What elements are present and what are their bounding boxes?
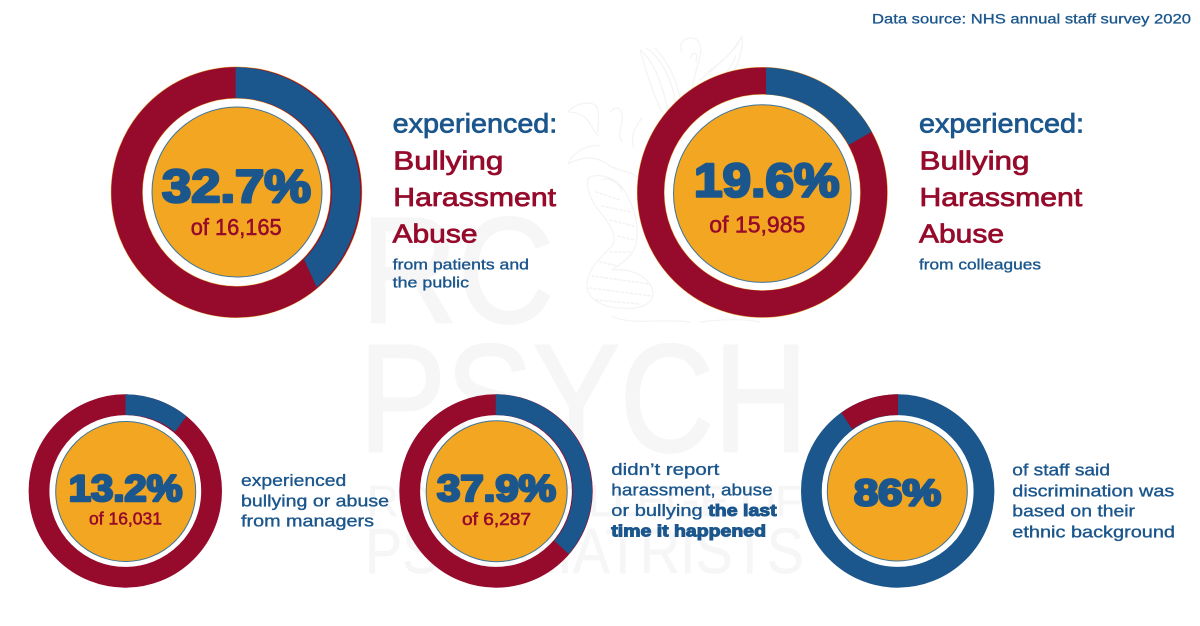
watermark text ROYAL COLLEGE OF: ROYAL COLLEGE OF: [367, 477, 802, 526]
description text: didn’t report: [611, 461, 720, 479]
sample size: of 16,031: [89, 508, 162, 528]
sample size: of 15,985: [709, 211, 805, 237]
donut chart 32.7%: [127, 67, 360, 302]
watermark text PSYCHIATRISTS: PSYCHIATRISTS: [365, 515, 804, 587]
description text: from colleagues: [919, 256, 1041, 273]
watermark text RC: RC: [361, 186, 554, 354]
sample size: of 16,165: [191, 214, 282, 240]
description text: ethnic background: [1012, 523, 1175, 541]
value 37.9%: 37.9%: [437, 468, 556, 509]
donut chart 86%: [811, 394, 984, 577]
description text: or bullying: [611, 502, 703, 520]
description text: experienced: [241, 472, 346, 490]
watermark: RCPsych logotype and crest: [359, 36, 808, 587]
description text: discrimination was: [1012, 482, 1174, 500]
donut chart 37.9%: [410, 394, 592, 577]
description text: Abuse: [392, 219, 478, 249]
description text: the public: [393, 275, 470, 292]
value 86%: 86%: [854, 471, 941, 513]
donut chart 13.2%: [39, 394, 212, 577]
description text: time it happened: [611, 523, 766, 541]
description text: harassment, abuse: [611, 482, 773, 500]
description text: from patients and: [393, 256, 529, 273]
description text: Abuse: [919, 219, 1004, 249]
sample size: of 6,287: [462, 509, 531, 529]
description text: [392, 109, 557, 292]
panel: managers: [39, 394, 389, 577]
data source note: Data source: NHS annual staff survey 2020: [872, 10, 1191, 26]
description text: [241, 472, 389, 531]
description text: Bullying: [920, 145, 1030, 175]
description text: experienced:: [919, 109, 1084, 139]
description text: of staff said: [1012, 462, 1110, 480]
panel: colleagues: [651, 68, 1084, 304]
panel: ethnic background: [811, 394, 1175, 577]
description text: the last: [708, 502, 777, 520]
watermark text PSYCH: PSYCH: [359, 313, 808, 484]
description text: experienced:: [393, 109, 557, 139]
value 13.2%: 13.2%: [69, 468, 182, 509]
description text: based on their: [1012, 503, 1136, 521]
description text: [919, 109, 1084, 273]
value 19.6%: 19.6%: [694, 154, 840, 207]
watermark crest: serpent and bird: [568, 36, 760, 322]
panel: patients and the public: [127, 67, 557, 302]
panel: did not report: [410, 394, 777, 577]
description text: Harassment: [920, 182, 1083, 212]
value 32.7%: 32.7%: [162, 160, 311, 212]
description text: from managers: [241, 513, 374, 531]
description text: [611, 461, 777, 541]
description text: [1012, 462, 1175, 541]
description text: bullying or abuse: [241, 493, 389, 511]
donut chart 19.6%: [651, 68, 874, 304]
description text: Bullying: [393, 145, 503, 175]
description text: Harassment: [393, 182, 557, 212]
